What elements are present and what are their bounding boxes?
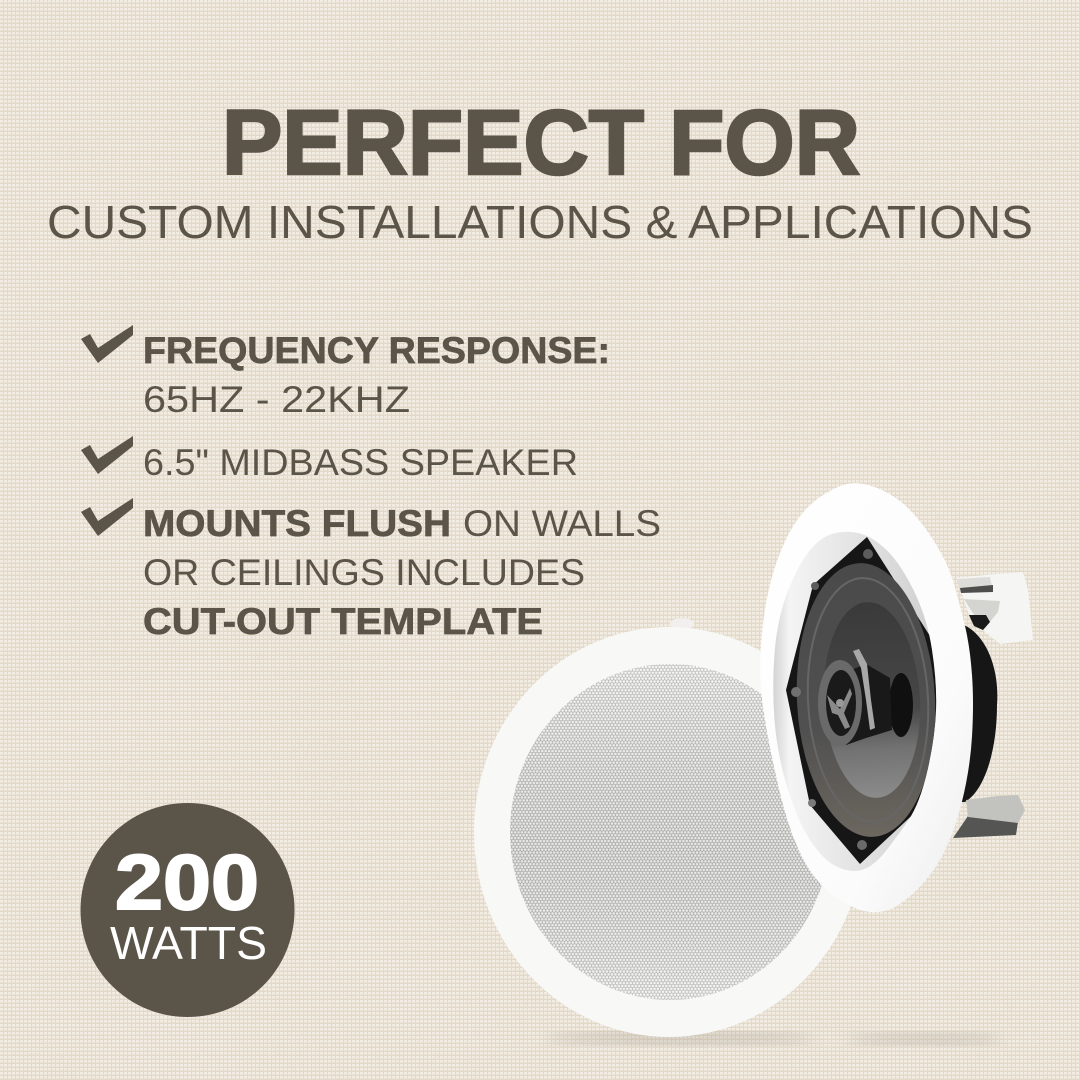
feature: midbass speaker: 6.5" MIDBASS SPEAKER: [143, 442, 578, 483]
icon: check mark mounts: [81, 498, 133, 536]
feature: frequency response label: FREQUENCY RESPONSE:: [143, 330, 610, 371]
floor shadows: [545, 1032, 1003, 1045]
tweeter inner: [826, 670, 856, 736]
feature: frequency response value: 65HZ - 22KHZ: [143, 379, 410, 420]
surround: [796, 563, 936, 837]
rear mounting clip top: [957, 572, 1033, 644]
subtitle: CUSTOM INSTALLATIONS & APPLICATIONS: [47, 196, 1033, 248]
mounting ring: [760, 483, 973, 912]
speaker: open driver view: [760, 483, 1033, 912]
feature list: [81, 325, 661, 642]
tweeter terminal: [853, 649, 875, 730]
ring opening: [773, 532, 936, 871]
icon: check mark frequency: [81, 325, 133, 363]
magnet: [889, 673, 913, 737]
feature: on walls: ON WALLS: [463, 503, 661, 544]
driver: [786, 537, 945, 864]
surround highlight: [802, 575, 934, 825]
badge number: 200: [115, 838, 259, 926]
tweeter blades: [827, 688, 852, 729]
rear housing band: [948, 622, 997, 802]
motor neck: [846, 664, 892, 745]
cone: [825, 602, 920, 798]
feature: cut-out template: CUT-OUT TEMPLATE: [143, 601, 543, 642]
mesh grille: [510, 664, 830, 1000]
feature: or ceilings includes: OR CEILINGS INCLUDES: [143, 552, 585, 593]
badge: 200 watts: [80, 803, 294, 1017]
hexagonal basket: [786, 537, 945, 864]
basket screws: [863, 549, 873, 559]
outer bezel: [474, 627, 864, 1037]
badge unit: WATTS: [110, 917, 267, 969]
speaker: front grille view: [474, 618, 864, 1037]
feature: mounts flush bold: MOUNTS FLUSH: [143, 503, 451, 544]
title: PERFECT FOR: [222, 92, 860, 194]
tweeter outer ring: [818, 660, 862, 746]
rear mounting clip bottom: [953, 795, 1025, 838]
top tab: [670, 618, 694, 630]
icon: check mark midbass: [81, 436, 133, 474]
